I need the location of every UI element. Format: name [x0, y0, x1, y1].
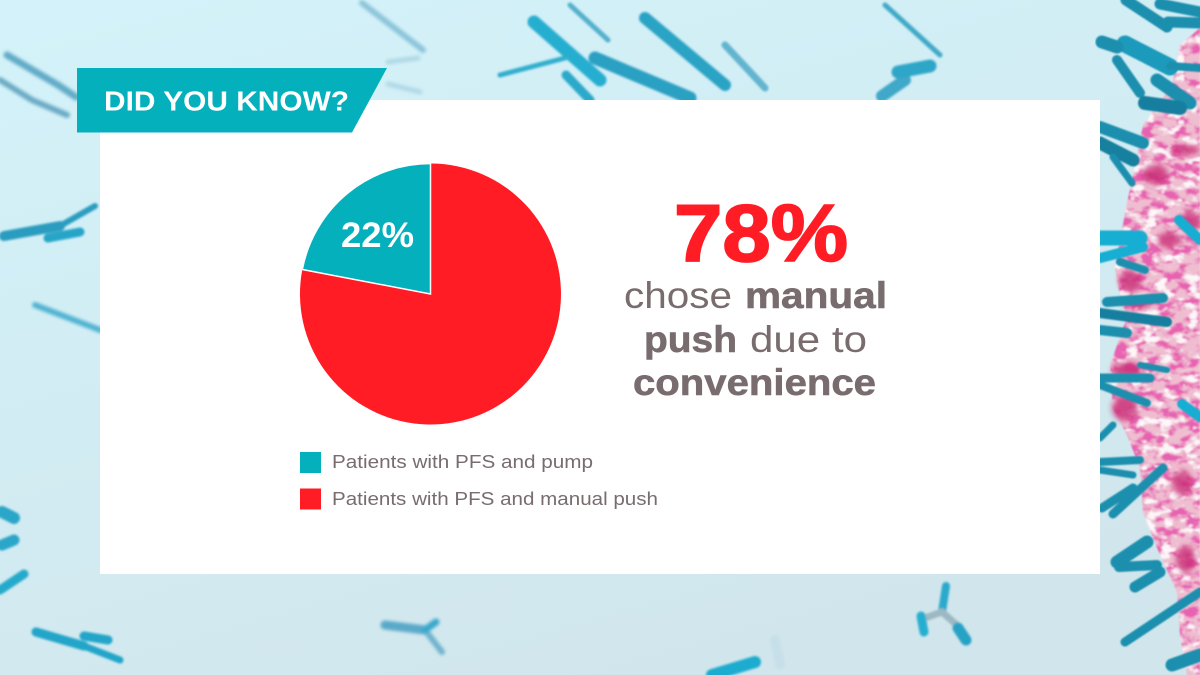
callout text line 1: [624, 275, 887, 316]
legend item: pump: Patients with PFS and pump: [332, 452, 593, 472]
heading banner: did you know: DID YOU KNOW?: [104, 86, 349, 116]
legend item: manual push: Patients with PFS and manual push: [332, 489, 658, 509]
virus spike proteins: [1100, 0, 1200, 665]
small teal spikes: [0, 5, 966, 675]
callout text line 2: push: [644, 319, 737, 360]
callout text line 1: chose: [624, 275, 732, 316]
callout text line 2: due to: [750, 319, 867, 360]
virus body: [1110, 28, 1200, 675]
callout: 78% chose manual push due to convenience: [624, 189, 887, 403]
legend: [300, 452, 658, 510]
heading banner: did you know: [77, 68, 387, 132]
pie slice: pump 22%: [302, 163, 430, 294]
white content card: [100, 100, 1100, 574]
big statistic: 78%: [674, 189, 848, 279]
pie chart: [300, 163, 561, 424]
pie slice: manual push 78%: [300, 164, 561, 424]
pie label: 22%: 22%: [341, 216, 414, 255]
callout text line 3: convenience: [633, 362, 876, 403]
callout text line 1: manual: [745, 275, 887, 316]
callout text line 2: [644, 319, 867, 360]
dark magenta patches: [1112, 145, 1200, 572]
faint out-of-focus particles: [0, 3, 780, 665]
